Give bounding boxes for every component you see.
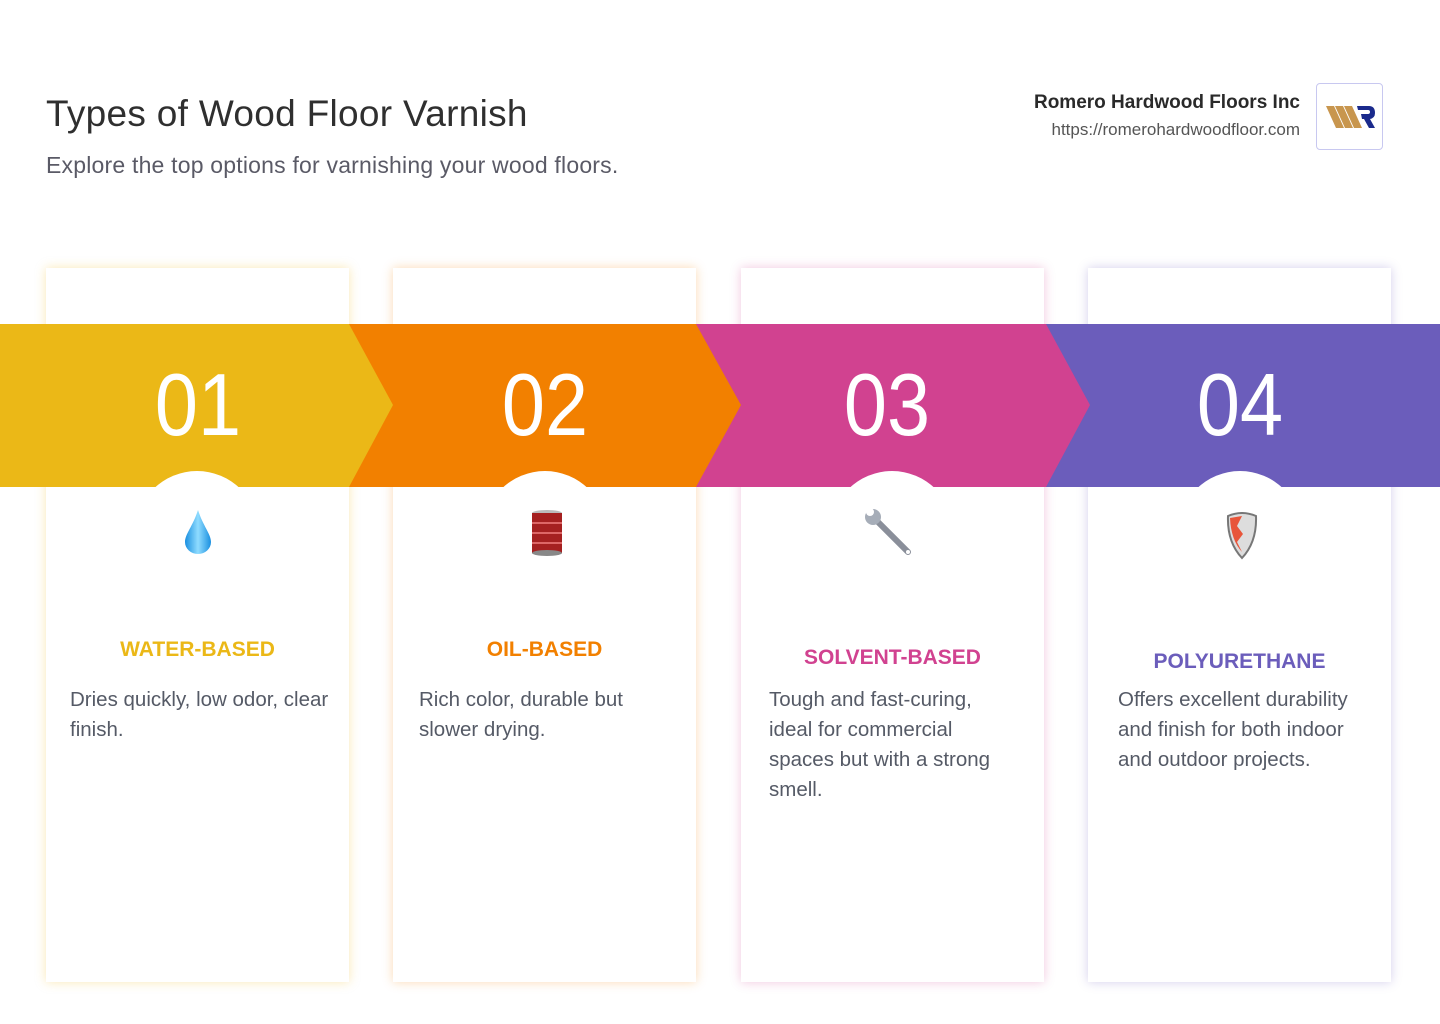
- chevron band: [0, 324, 1440, 487]
- text: 04: [1197, 355, 1283, 454]
- card 1 text: [70, 638, 328, 741]
- text: 02: [502, 355, 588, 454]
- card 3: [741, 268, 1044, 982]
- card 2 text: Rich color, durable but slower drying.: [419, 688, 623, 741]
- text: 03: [844, 355, 930, 454]
- card 2 text: [419, 638, 623, 741]
- logo: [1316, 83, 1383, 150]
- icon: water drop: [185, 510, 211, 554]
- card 2 text: OIL-BASED: [487, 638, 602, 661]
- icon circles: [135, 471, 259, 595]
- card 4: [1088, 268, 1391, 982]
- card 3 text: SOLVENT-BASED: [804, 646, 981, 669]
- card 3 text: Tough and fast-curing, ideal for commercial spaces but with a strong smell.: [769, 688, 990, 801]
- brand text: [1034, 92, 1300, 139]
- subtitle: Explore the top options for varnishing your wood floors.: [46, 152, 618, 178]
- title: Types of Wood Floor Varnish: [46, 93, 528, 134]
- icon: shield: [1226, 512, 1258, 560]
- icon: barrel: [532, 510, 562, 556]
- brand text: Romero Hardwood Floors Inc: [1034, 92, 1300, 113]
- card 1: [46, 268, 349, 982]
- card 1 text: Dries quickly, low odor, clear finish.: [70, 688, 328, 741]
- card 2: [393, 268, 696, 982]
- card 4 text: Offers excellent durability and finish for both indoor and outdoor projects.: [1118, 688, 1348, 771]
- icon: wrench: [865, 509, 911, 555]
- card 1 text: WATER-BASED: [120, 638, 275, 661]
- numbers: 01: [155, 355, 241, 454]
- brand text: https://romerohardwoodfloor.com: [1051, 120, 1300, 139]
- card 4 text: POLYURETHANE: [1154, 650, 1325, 673]
- card 4 text: [1118, 650, 1348, 771]
